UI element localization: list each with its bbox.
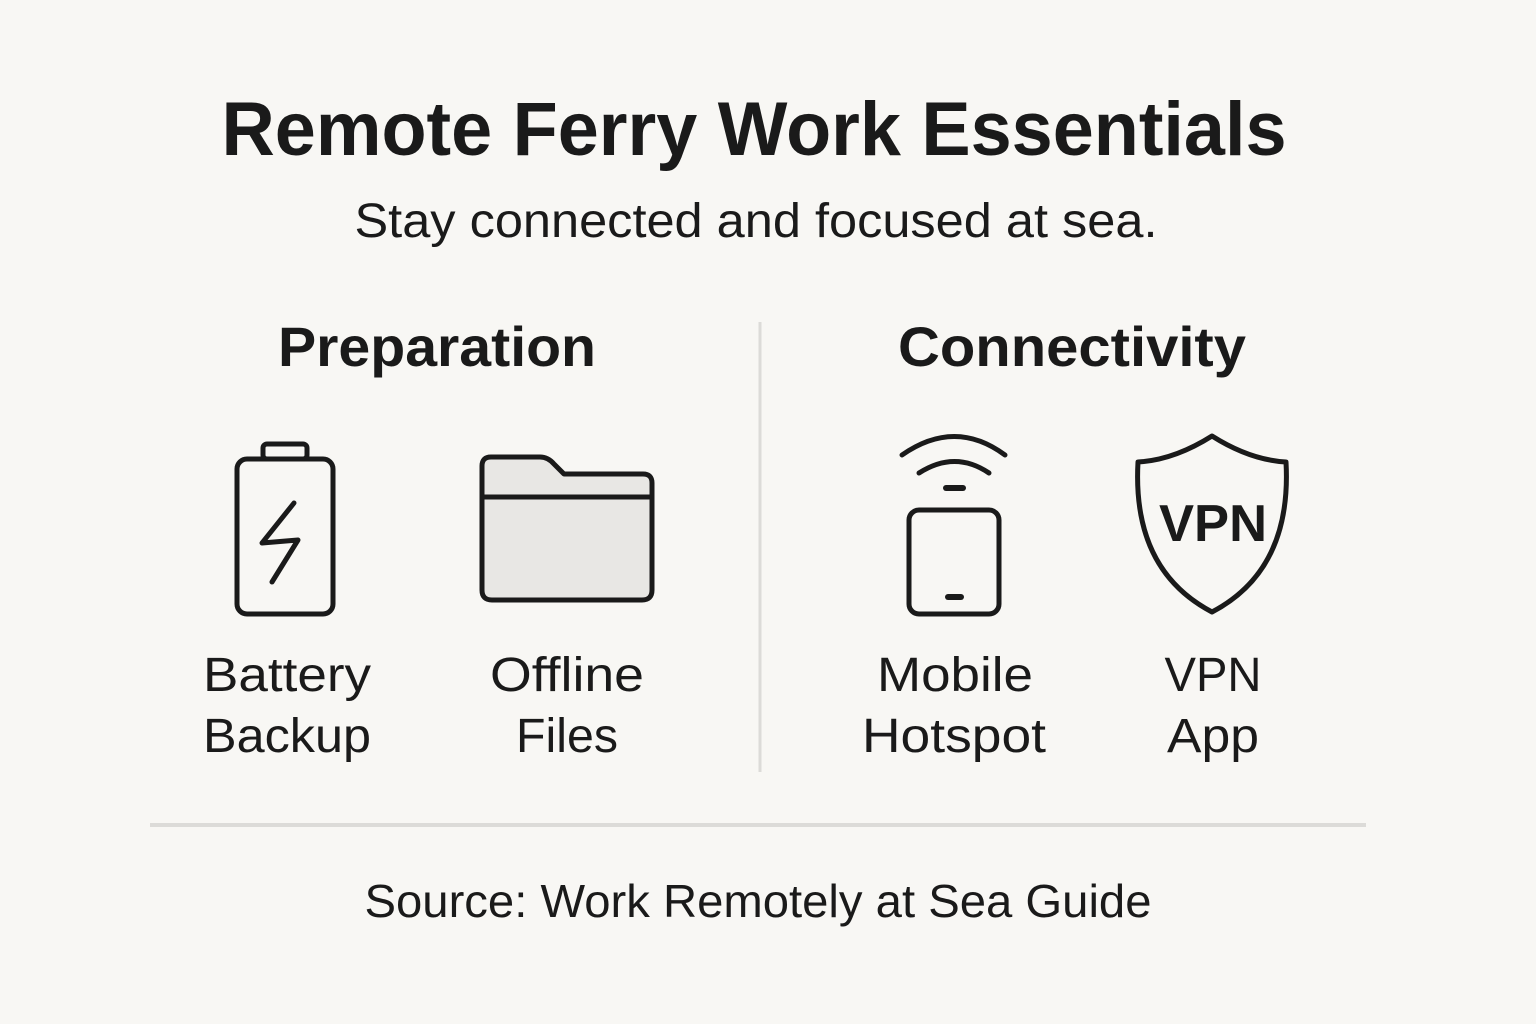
panel: preparation bbox=[203, 315, 652, 763]
title: Remote Ferry Work Essentials bbox=[222, 87, 1286, 172]
label: Offline Files: Offline bbox=[490, 649, 644, 702]
label: Offline Files: Files bbox=[516, 710, 618, 763]
label: Mobile Hotspot: Mobile bbox=[877, 649, 1033, 702]
label: Mobile Hotspot: Hotspot bbox=[862, 710, 1046, 763]
panel: connectivity bbox=[862, 315, 1286, 763]
icon: folder bbox=[482, 457, 652, 600]
icon: battery bbox=[237, 444, 333, 614]
heading: Preparation: Preparation bbox=[278, 315, 596, 378]
icon: mobile hotspot bbox=[902, 436, 1005, 614]
heading: Connectivity: Connectivity bbox=[898, 315, 1246, 378]
icon: VPN shield bbox=[1138, 436, 1286, 612]
source: Source: Work Remotely at Sea Guide bbox=[364, 875, 1152, 927]
label: VPN App: VPN bbox=[1164, 649, 1262, 702]
label: VPN App: App bbox=[1167, 710, 1259, 763]
label: Battery Backup: Battery bbox=[203, 649, 371, 702]
subtitle: Stay connected and focused at sea. bbox=[354, 195, 1158, 248]
icon: VPN shield: VPN bbox=[1159, 495, 1267, 553]
label: Battery Backup: Backup bbox=[203, 710, 371, 763]
